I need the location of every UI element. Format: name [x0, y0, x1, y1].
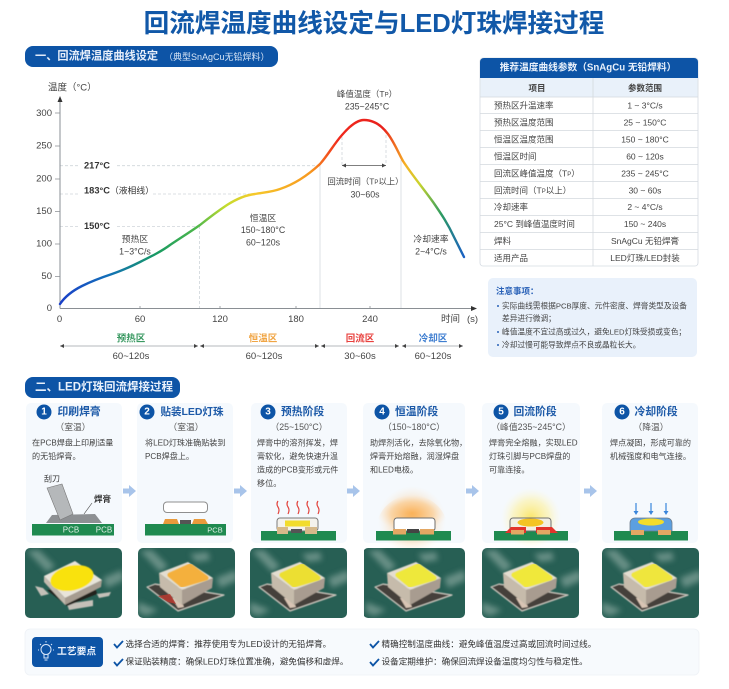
- table left column: P: [567, 172, 571, 178]
- icon: squeegee printing paste: [32, 474, 114, 536]
- step 1 text: 在PCB焊盘上印刷适量: [32, 438, 113, 448]
- step 6 text: 机械强度和电气连接。: [610, 451, 691, 461]
- y tick labels: 50: [41, 271, 52, 282]
- panel: notes: 注意事项：: [496, 286, 539, 296]
- table left column: P: [542, 189, 546, 195]
- zone annotations: 1~3°C/s: [119, 246, 151, 256]
- step 5 heading: 回流阶段: [514, 404, 557, 418]
- panel: notes: 差异进行微调；: [502, 313, 556, 323]
- table right column: 2 ~ 4°C/s: [627, 202, 663, 212]
- x tick labels: (s): [467, 314, 478, 325]
- step 3 text: 造成的PCB变形或元件: [257, 464, 338, 474]
- panel: notes: 实际曲线需根据PCB厚度、元件密度、焊膏类型及设备: [502, 300, 687, 310]
- step 4 text: 助焊剂活化，去除氧化物，: [370, 438, 467, 448]
- reflow time annotation: 30~60s: [350, 190, 380, 200]
- step 4 heading: （150~180°C）: [383, 422, 445, 432]
- photo: step 2 LED: [138, 548, 235, 618]
- step 2 text: PCB焊盘上。: [145, 451, 194, 461]
- icon: light bulb: [38, 641, 54, 660]
- icon: LED with orange glow: [376, 486, 451, 554]
- step 2 heading: [140, 404, 224, 432]
- zone duration bar: 回流区: [346, 332, 375, 344]
- step 5 text: 可靠连接。: [489, 464, 529, 474]
- step 2 heading: 贴装LED灯珠: [160, 405, 224, 418]
- step 4 heading: 恒温阶段: [395, 404, 438, 418]
- step 2 text: [145, 438, 226, 461]
- y tick labels: 250: [36, 140, 52, 152]
- step 3 text: 移位。: [257, 478, 281, 488]
- step 1 text: 的无铅焊膏。: [32, 451, 81, 461]
- zone annotations: 150~180°C: [241, 225, 286, 235]
- zone annotations: 2~4°C/s: [415, 246, 447, 256]
- peak annotation: [337, 89, 397, 112]
- step 3 text: 焊膏中的溶剂挥发，焊: [257, 438, 338, 448]
- zone duration bar: 冷却区: [419, 332, 448, 344]
- panel: step 6 cooling: [602, 403, 698, 543]
- axes: [55, 96, 477, 311]
- panel: step 4 soak: [363, 403, 467, 554]
- step 1 heading: 1: [41, 406, 47, 418]
- threshold labels: 150°C: [84, 221, 110, 231]
- threshold labels: [84, 161, 154, 231]
- table left column: 适用产品: [494, 253, 528, 263]
- step 1 heading: （室温）: [55, 421, 91, 432]
- step 2 text: 将LED灯珠准确贴装到: [145, 438, 226, 448]
- table left column: 回流时间（T: [494, 186, 542, 196]
- panel: step 5 reflow: [482, 403, 580, 548]
- table left column: 预热区升温速率: [494, 100, 554, 110]
- key point checklist: [114, 638, 596, 666]
- icon: squeegee printing paste: 刮刀: [44, 474, 60, 484]
- table left column: 预热区温度范围: [494, 118, 554, 128]
- step 5 text: [489, 438, 578, 474]
- key points badge: [32, 637, 103, 667]
- step 3 heading: 预热阶段: [281, 404, 324, 418]
- x tick labels: 时间: [441, 313, 460, 325]
- y tick labels: 200: [36, 174, 52, 184]
- icon: squeegee printing paste: PCB: [63, 526, 79, 534]
- reflow temperature chart: [36, 82, 478, 362]
- step 6 heading: [614, 404, 678, 432]
- step 5 heading: （峰值235~245°C）: [491, 421, 571, 432]
- threshold labels: 217°C: [84, 161, 110, 171]
- table column headings: [528, 83, 662, 93]
- step 5 heading: [491, 404, 571, 432]
- zone annotations: 冷却速率: [413, 233, 449, 244]
- panel: notes: [488, 278, 697, 357]
- step 2 heading: （室温）: [168, 421, 204, 432]
- zone annotations: 恒温区: [250, 212, 276, 223]
- table right column: 235 ~ 245°C: [621, 168, 669, 178]
- zone duration bar: 60~120s: [415, 351, 452, 362]
- reflow time annotation: 以上）: [378, 176, 404, 186]
- photo: step 4 LED: [364, 548, 465, 618]
- table right column: 60 ~ 120s: [626, 152, 664, 162]
- x tick labels: [57, 313, 478, 325]
- table left column: 恒温区时间: [494, 152, 537, 162]
- reflow time annotation: P: [374, 180, 378, 186]
- zone duration bar: 30~60s: [344, 351, 376, 362]
- step 4 text: 焊膏开始熔融，润湿焊盘: [370, 451, 459, 461]
- zone annotations: [119, 212, 449, 256]
- table left column: 恒温区温度范围: [494, 134, 554, 144]
- table right column: [610, 100, 680, 263]
- panel: recommended parameters table: [480, 58, 698, 266]
- icon: LED with molten solder: [494, 488, 568, 548]
- key point checklist: 精确控制温度曲线：避免峰值温度过高或回流时间过线。: [382, 638, 596, 649]
- table right column: 30 ~ 60s: [629, 186, 661, 196]
- icon: squeegee printing paste: PCB: [96, 526, 112, 534]
- x tick labels: 0: [57, 314, 62, 325]
- step 2 heading: 2: [144, 406, 150, 418]
- table left column: 焊料: [494, 236, 512, 246]
- step 1 text: [32, 438, 113, 461]
- x tick labels: 60: [135, 314, 145, 325]
- arrow: step 2 to 3: [234, 485, 247, 497]
- table left column: ）: [571, 168, 580, 178]
- arrow: step 3 to 4: [347, 485, 360, 497]
- table right column: 1 ~ 3°C/s: [627, 100, 663, 110]
- y tick labels: 150: [36, 206, 52, 217]
- y tick labels: 100: [36, 238, 52, 250]
- zone duration bar: [60, 332, 463, 362]
- step 6 heading: 冷却阶段: [634, 404, 678, 418]
- reflow time annotation: [327, 164, 404, 200]
- y tick labels: 0: [47, 303, 52, 314]
- panel: notes: 冷却过慢可能导致焊点不良或晶粒长大。: [502, 340, 640, 350]
- panel: step 1 print solder paste: [26, 403, 122, 543]
- step 1 heading: [36, 404, 101, 432]
- zone annotations: 60~120s: [246, 238, 281, 248]
- step 5 text: 灯珠引脚与PCB焊盘的: [489, 451, 570, 461]
- arrow: step 4 to 5: [466, 485, 479, 497]
- key point checklist: 选择合适的焊膏：推荐使用专为LED设计的无铅焊膏。: [126, 638, 331, 649]
- step 5 text: 焊膏完全熔融，实现LED: [489, 438, 578, 448]
- key point checklist: 保证贴装精度：确保LED灯珠位置准确，避免偏移和虚焊。: [126, 656, 348, 666]
- photo: step 5 LED: [482, 548, 579, 618]
- panel: notes: 峰值温度不宜过高或过久，避免LED灯珠受损或变色；: [502, 326, 686, 336]
- arrow: step 5 to 6: [584, 485, 597, 497]
- zone duration bar: 60~120s: [246, 351, 283, 362]
- zone duration bar: 恒温区: [249, 332, 278, 344]
- table left column: 冷却速率: [494, 202, 529, 212]
- table left column: [494, 100, 580, 263]
- table right column: SnAgCu 无铅焊膏: [611, 236, 679, 246]
- step 6 text: [610, 438, 691, 461]
- x tick labels: 180: [288, 314, 304, 325]
- photo: step 6 LED: [602, 548, 699, 618]
- zone duration bar: 60~120s: [113, 351, 150, 362]
- step 4 heading: [374, 404, 445, 432]
- step 1 heading: 印刷焊膏: [58, 404, 101, 418]
- step 3 heading: （25~150°C）: [270, 422, 328, 432]
- section heading: temperature curve: （典型SnAgCu无铅焊料）: [164, 51, 270, 62]
- photo: step 3 LED: [250, 548, 347, 618]
- step 4 text: [370, 438, 467, 474]
- table right column: 150 ~ 180°C: [621, 134, 669, 144]
- temperature curve: [60, 120, 464, 304]
- step 6 text: 焊点凝固，形成可靠的: [610, 438, 691, 448]
- step 4 heading: 4: [379, 406, 385, 418]
- y tick labels: 300: [36, 108, 52, 119]
- icon: LED above pads: PCB: [207, 526, 223, 534]
- zone annotations: 预热区: [122, 233, 148, 244]
- step 3 heading: [260, 404, 328, 432]
- table header: [480, 58, 698, 78]
- zone duration bar: 预热区: [117, 332, 146, 344]
- table right column: LED灯珠/LED封装: [610, 253, 680, 263]
- threshold labels: 183°C（液相线）: [84, 184, 154, 196]
- step 4 text: 和LED电极。: [370, 464, 418, 474]
- peak annotation: 峰值温度（T: [337, 89, 385, 99]
- table header: 推荐温度曲线参数（SnAgCu 无铅焊料）: [500, 60, 676, 74]
- icon: heat arrows over LED: [261, 501, 336, 540]
- step 6 heading: （降温）: [633, 421, 669, 432]
- table left column: 25°C 到峰值温度时间: [494, 219, 575, 229]
- arrow: step 1 to 2: [123, 485, 136, 497]
- section heading: temperature curve: 一、回流焊温度曲线设定: [35, 48, 158, 62]
- step 6 heading: 6: [619, 406, 625, 418]
- photo: step 1 LED: [25, 548, 124, 618]
- section heading: temperature curve: [25, 46, 278, 67]
- step 3 text: [257, 438, 338, 488]
- section heading: LED soldering process: 二、LED灯珠回流焊接过程: [35, 380, 173, 394]
- title: 回流焊温度曲线设定与LED灯珠焊接过程: [144, 9, 604, 38]
- table left column: 回流区峰值温度（T: [494, 168, 567, 178]
- step 3 heading: 3: [265, 406, 271, 418]
- icon: squeegee printing paste: 焊膏: [94, 494, 112, 504]
- reflow time annotation: 回流时间（T: [327, 176, 374, 186]
- table right column: 150 ~ 240s: [624, 219, 666, 229]
- x tick labels: 120: [212, 314, 228, 325]
- table column headings: 项目: [528, 83, 546, 93]
- step 5 heading: 5: [498, 406, 504, 418]
- y tick labels: [36, 108, 52, 314]
- x tick labels: 240: [362, 314, 378, 325]
- panel: step 3 preheat: [251, 403, 347, 543]
- panel: step 2 place LED: [137, 403, 233, 543]
- table left column: 以上）: [546, 186, 571, 196]
- table column headings: 参数范围: [628, 83, 662, 93]
- icon: cooling arrows over LED: [614, 503, 688, 540]
- y axis label: 温度（°C）: [48, 82, 97, 94]
- key point checklist: 设备定期维护：确保回流焊设备温度均匀性与稳定性。: [382, 656, 588, 666]
- step 3 text: 膏软化，避免快速升温: [257, 451, 338, 461]
- section heading: LED soldering process: [25, 377, 180, 398]
- table right column: 25 ~ 150°C: [624, 118, 666, 128]
- panel: process key points: [25, 629, 699, 675]
- peak annotation: P: [385, 92, 389, 98]
- key points badge: 工艺要点: [57, 644, 96, 658]
- peak annotation: ）: [389, 89, 397, 99]
- peak annotation: 235~245°C: [345, 102, 390, 112]
